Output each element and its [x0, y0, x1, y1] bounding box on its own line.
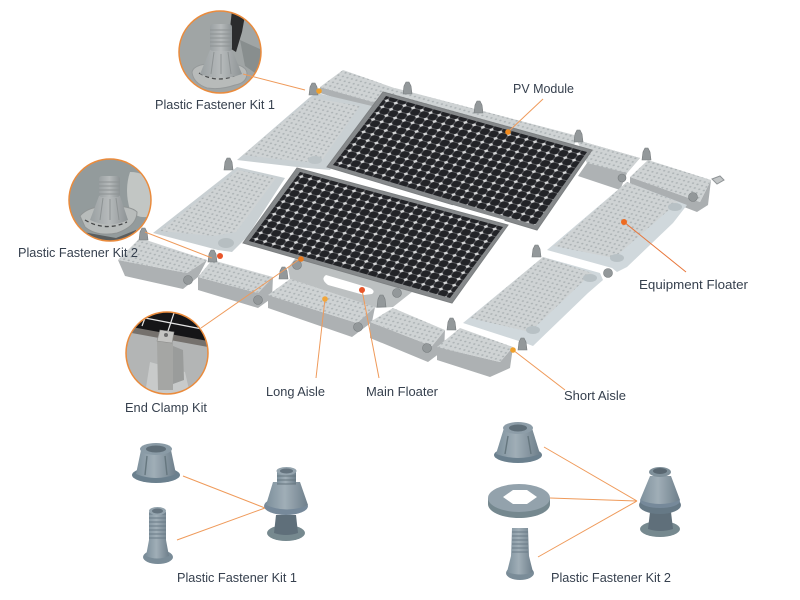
right long floaters	[463, 182, 687, 346]
labels: Long Aisle	[266, 384, 325, 399]
inset: plastic fastener kit 1	[179, 10, 262, 93]
far row floaters	[320, 70, 724, 212]
kit 2 cap	[494, 422, 542, 463]
marker dots	[217, 88, 627, 353]
labels: Plastic Fastener Kit 2	[18, 245, 138, 260]
PV module lower	[243, 168, 508, 303]
labels: Short Aisle	[564, 388, 626, 403]
kit 2 caption: Plastic Fastener Kit 2	[551, 570, 671, 585]
inset: plastic fastener kit 2	[69, 159, 152, 242]
fastener bolts	[139, 82, 698, 352]
inset ring 1	[179, 11, 261, 93]
inset: end clamp kit	[126, 310, 208, 394]
inset ring 2	[69, 159, 151, 241]
kit 1 cap	[132, 443, 180, 483]
labels: Equipment Floater	[639, 277, 749, 292]
labels: Main Floater	[366, 384, 439, 399]
kit 2 threaded bolt	[506, 528, 534, 580]
kit 1 caption: Plastic Fastener Kit 1	[177, 570, 297, 585]
PV module upper	[327, 92, 592, 230]
labels: Plastic Fastener Kit 1	[155, 97, 275, 112]
leader lines	[145, 74, 686, 557]
kit 1 threaded bolt	[143, 507, 173, 564]
front row floaters	[118, 238, 513, 377]
main floater plate	[288, 256, 412, 308]
kit 1 assembled fastener	[264, 467, 308, 541]
kit 2 assembled fastener	[639, 467, 681, 537]
labels	[18, 81, 749, 415]
inset ring 3	[126, 312, 208, 394]
left long floaters	[153, 93, 372, 252]
floating PV platform	[118, 70, 724, 377]
gap between modules	[326, 171, 505, 222]
kit 2 parts	[488, 422, 681, 580]
labels: PV Module	[513, 81, 574, 96]
kit 2 ring	[488, 484, 550, 518]
kit 1 parts	[132, 443, 308, 564]
labels: End Clamp Kit	[125, 400, 207, 415]
